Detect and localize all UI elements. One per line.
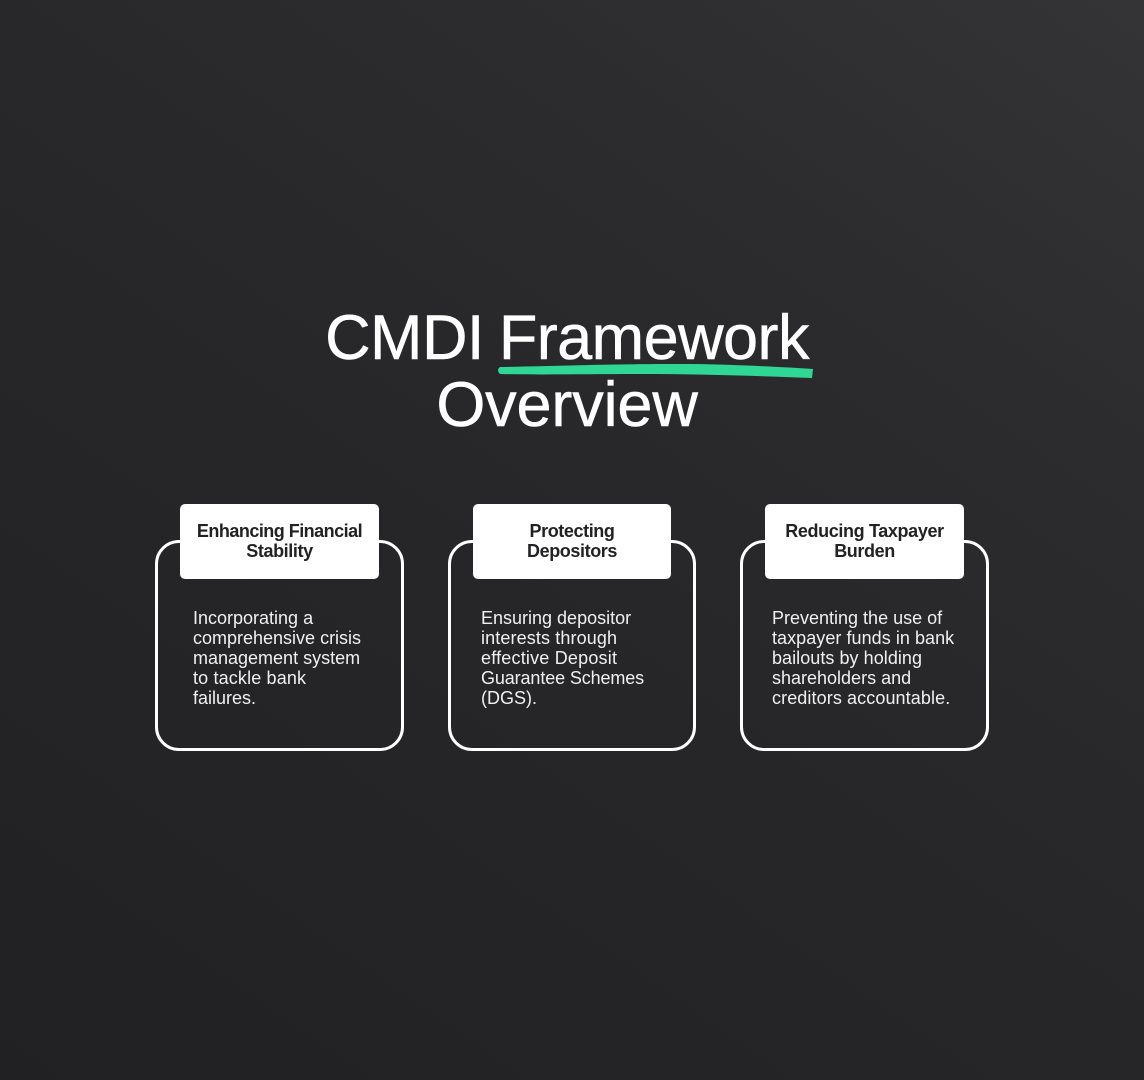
text: Protecting Depositors body: interests through xyxy=(481,628,617,648)
text: Enhancing Financial Stability body xyxy=(193,608,361,708)
panel: Reducing Taxpayer Burden xyxy=(740,540,989,751)
title xyxy=(325,303,810,440)
heading: Enhancing Financial Stability: Stability xyxy=(246,541,313,561)
heading: Enhancing Financial Stability: Enhancing Financial xyxy=(197,521,362,541)
text: Protecting Depositors body: Ensuring depositor xyxy=(481,608,631,628)
heading: Protecting Depositors xyxy=(473,504,671,579)
heading: Enhancing Financial Stability xyxy=(180,504,379,579)
title line 2: Overview xyxy=(436,370,698,440)
text: Protecting Depositors body: Guarantee Schemes xyxy=(481,668,644,688)
text: Reducing Taxpayer Burden body: creditors accountable. xyxy=(772,688,950,708)
text: Protecting Depositors body: (DGS). xyxy=(481,688,537,708)
text: Protecting Depositors body xyxy=(481,608,644,708)
text: Reducing Taxpayer Burden body xyxy=(772,608,954,708)
text: Enhancing Financial Stability body: to tackle bank xyxy=(193,668,306,688)
panel: Protecting Depositors xyxy=(448,540,696,751)
heading: Reducing Taxpayer Burden: Reducing Taxpayer xyxy=(785,521,944,541)
heading: Reducing Taxpayer Burden xyxy=(765,504,964,579)
text: Reducing Taxpayer Burden body: taxpayer funds in bank xyxy=(772,628,954,648)
green brush underline xyxy=(498,364,813,378)
text: Reducing Taxpayer Burden body: Preventing the use of xyxy=(772,608,942,628)
heading: Reducing Taxpayer Burden: Burden xyxy=(834,541,895,561)
heading: Protecting Depositors: Protecting xyxy=(529,521,614,541)
title line 1: CMDI Framework xyxy=(325,303,809,373)
text: Enhancing Financial Stability body: Incorporating a xyxy=(193,608,313,628)
heading: Protecting Depositors: Depositors xyxy=(527,541,617,561)
text: Enhancing Financial Stability body: management system xyxy=(193,648,360,668)
text: Protecting Depositors body: effective Deposit xyxy=(481,648,617,668)
text: Enhancing Financial Stability body: failures. xyxy=(193,688,256,708)
text: Reducing Taxpayer Burden body: shareholders and xyxy=(772,668,911,688)
panel: Enhancing Financial Stability xyxy=(155,540,404,751)
text: Reducing Taxpayer Burden body: bailouts by holding xyxy=(772,648,922,668)
text: Enhancing Financial Stability body: comprehensive crisis xyxy=(193,628,361,648)
